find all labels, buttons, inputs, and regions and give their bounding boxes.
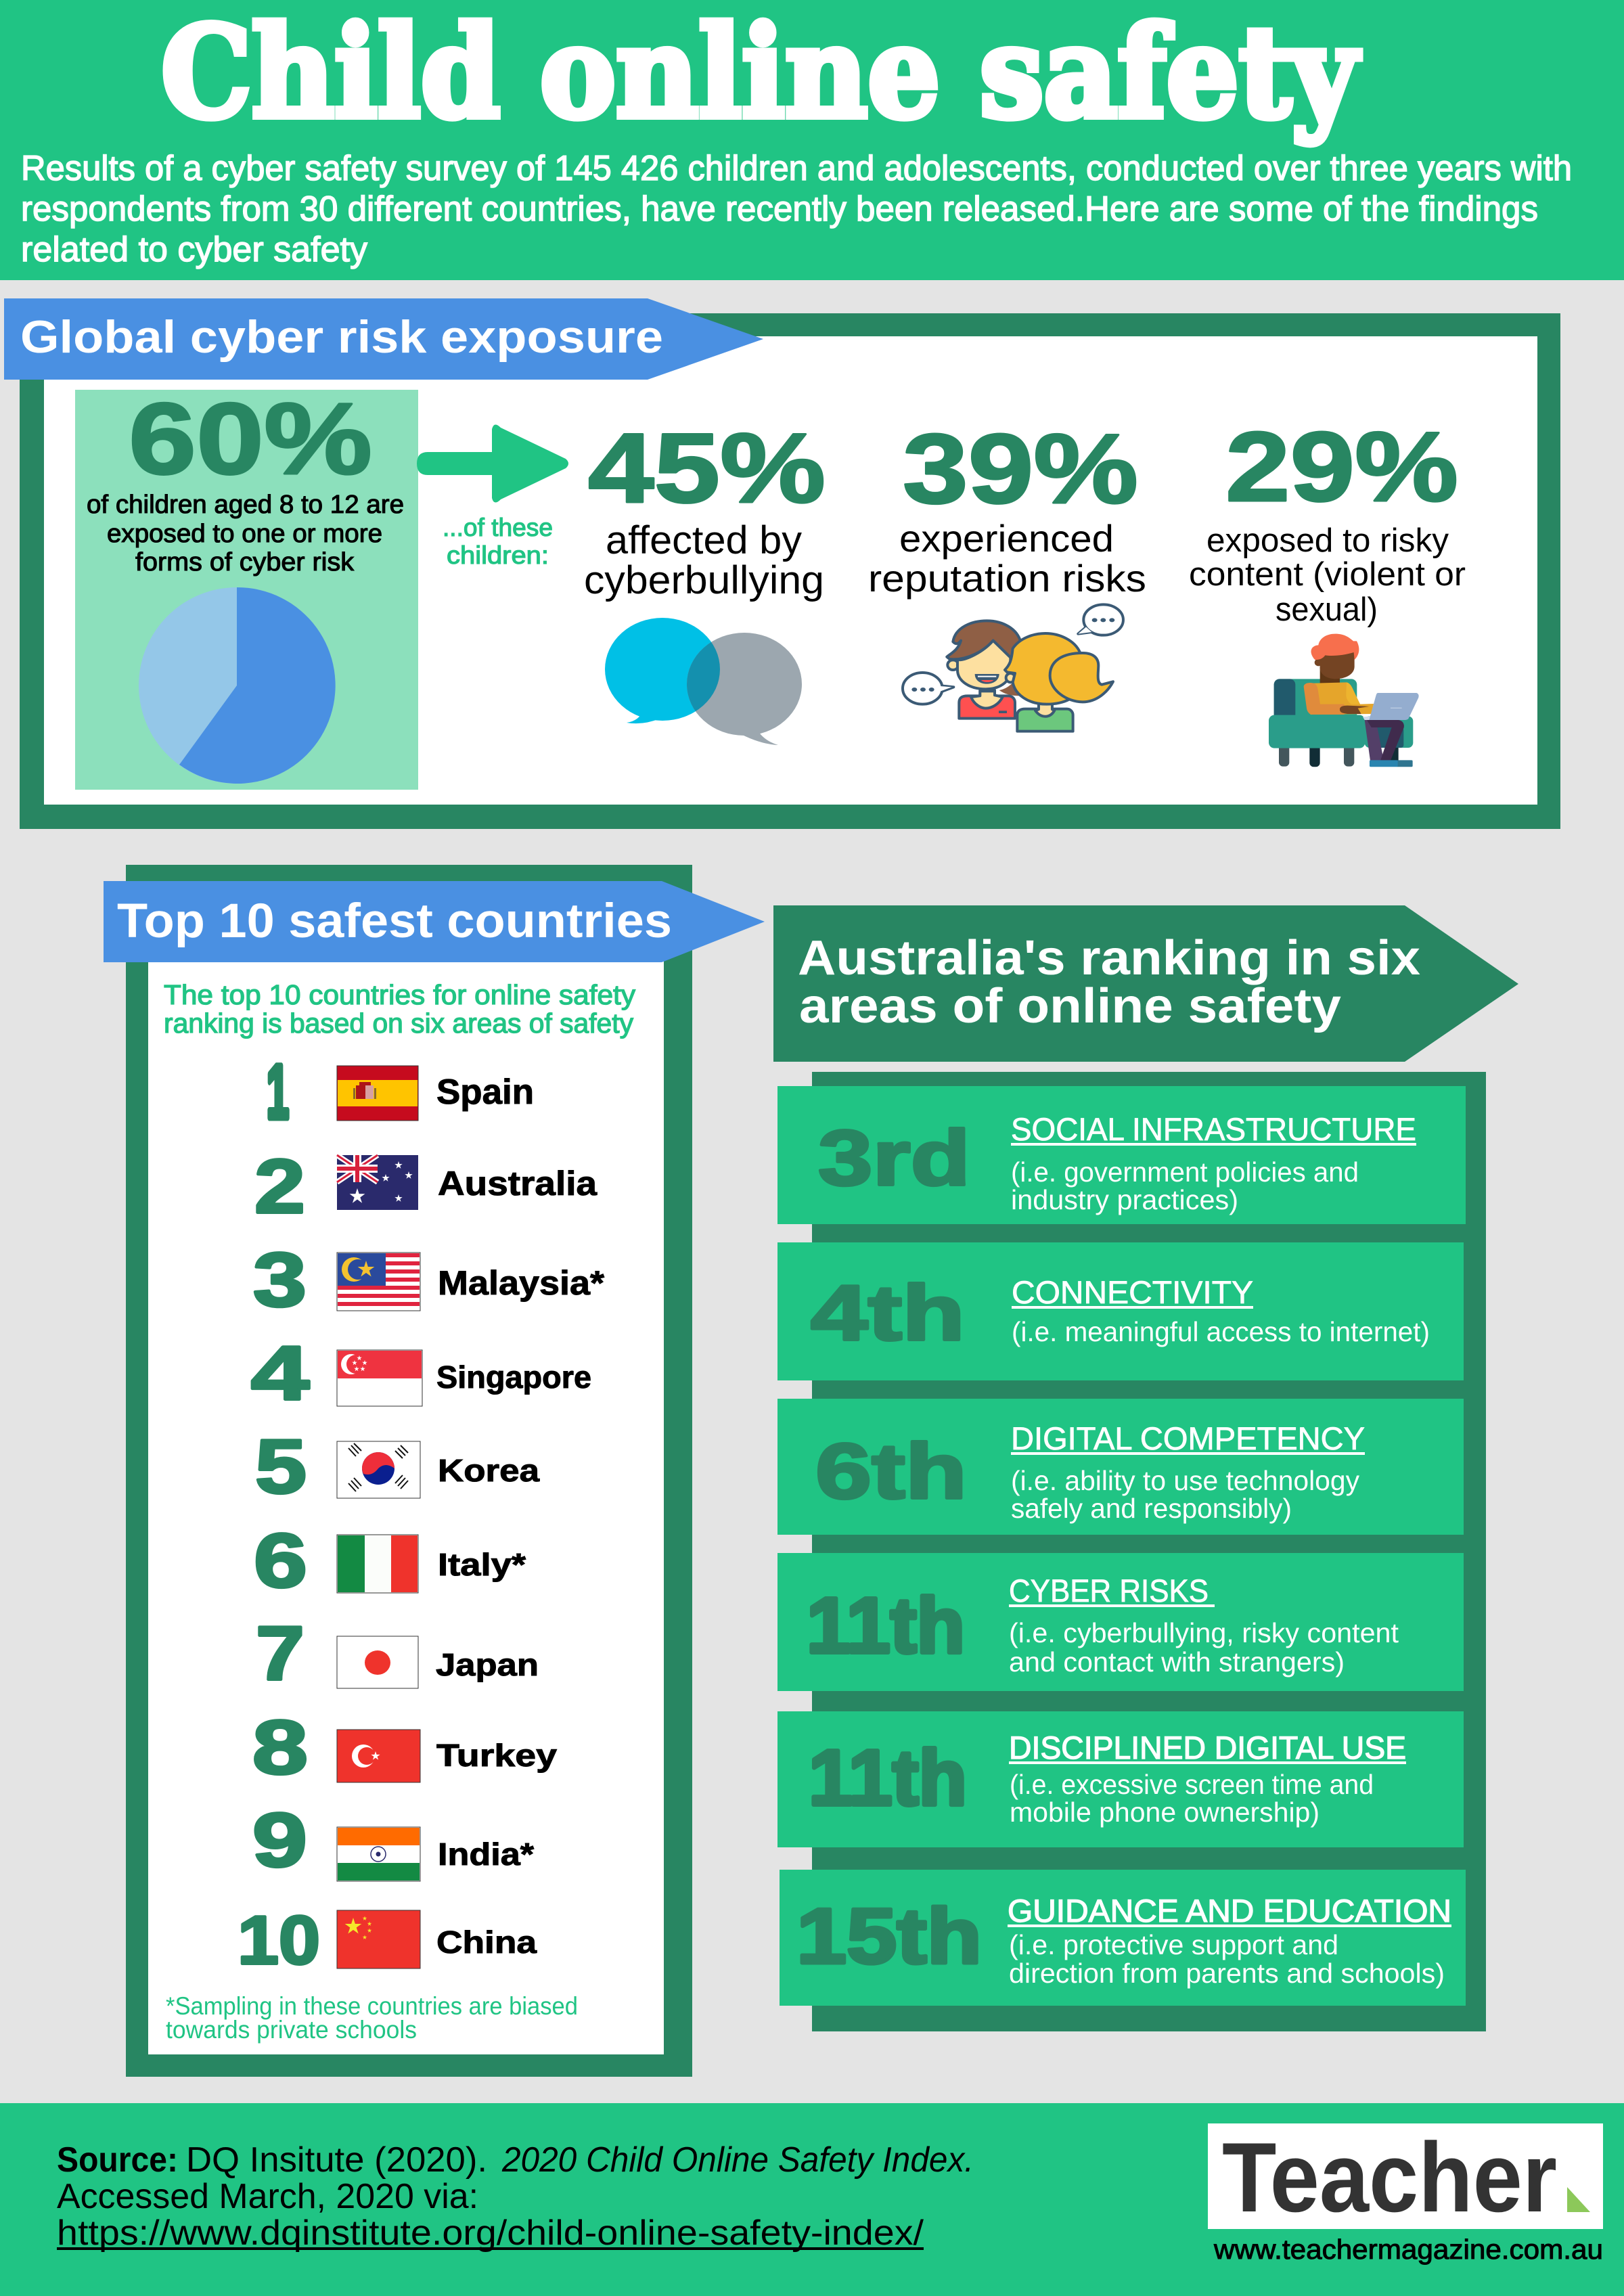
stat: 45% cyberbullying: cyberbullying xyxy=(584,558,824,602)
rank 1: Spain xyxy=(267,1050,534,1134)
intro text: respondents from 30 different countries, have recently been released.Here are some of the findings xyxy=(21,189,1538,229)
row: cyber risks 11th: CYBER RISKS xyxy=(1009,1573,1209,1608)
rank 1: Spain: Spain xyxy=(436,1073,534,1112)
banner: global cyber risk exposure xyxy=(4,298,763,380)
label: of these children xyxy=(443,514,553,569)
label: of these children: ...of these xyxy=(443,514,553,541)
banner: top 10 safest countries: Top 10 safest countries xyxy=(117,895,672,948)
row: guidance and education 15th: direction from parents and schools) xyxy=(1009,1958,1445,1989)
rank 8: Turkey: Turkey xyxy=(436,1738,557,1773)
arrow xyxy=(417,424,568,503)
rank 4: Singapore: Singapore xyxy=(436,1359,591,1395)
icon: speech bubbles xyxy=(605,618,802,745)
rank 3: Malaysia: Malaysia* xyxy=(438,1264,605,1302)
row: guidance and education 15th: (i.e. protective support and xyxy=(1009,1929,1338,1960)
stat: 39% reputation risks: 39% xyxy=(903,413,1138,524)
source citation: DQ Insitute (2020). xyxy=(186,2140,487,2180)
intro text: Results of a cyber safety survey of 145 426 children and adolescents, conducted over three years with xyxy=(21,149,1572,188)
panel: Australia's ranking xyxy=(773,905,1518,2031)
row: disciplined digital use 11th: DISCIPLINED DIGITAL USE xyxy=(1009,1730,1406,1765)
row: guidance and education 15th: 15th xyxy=(796,1892,982,1980)
stat: 60%: 60% xyxy=(129,382,372,495)
icon: two people talking xyxy=(903,604,1123,731)
rank 6: Italy: Italy* xyxy=(438,1547,526,1582)
row: social infrastructure 3rd: industry practices) xyxy=(1011,1184,1238,1215)
banner: Australia's ranking xyxy=(773,905,1518,1062)
row: guidance and education 15th: GUIDANCE AND EDUCATION xyxy=(1008,1893,1451,1929)
row: social infrastructure 3rd: 3rd xyxy=(818,1114,970,1202)
source citation: Source: xyxy=(57,2140,178,2180)
rank 10: China xyxy=(238,1903,537,1979)
rank 7: Japan xyxy=(256,1611,539,1696)
row: disciplined digital use 11th xyxy=(777,1711,1464,1847)
row: cyber risks 11th: 11th xyxy=(807,1581,965,1669)
rank 7: Japan: Japan xyxy=(436,1647,539,1682)
row: disciplined digital use 11th: (i.e. excessive screen time and xyxy=(1010,1769,1374,1800)
rank 9: India: India* xyxy=(438,1837,534,1872)
header band xyxy=(0,0,1624,280)
row: social infrastructure 3rd: (i.e. government policies and xyxy=(1011,1156,1359,1188)
icon: person with laptop on chair xyxy=(1269,634,1419,767)
rank 5: Korea: Korea xyxy=(438,1453,539,1488)
row: digital competency 6th: DIGITAL COMPETENCY xyxy=(1011,1420,1365,1456)
source citation: Accessed March, 2020 via: xyxy=(57,2177,478,2216)
row: digital competency 6th: safely and responsibly) xyxy=(1011,1493,1292,1524)
stat: 45% cyberbullying xyxy=(584,413,826,602)
rank 8: Turkey: 8 xyxy=(252,1705,308,1790)
rank 2: Australia: 2 xyxy=(254,1144,305,1229)
row: digital competency 6th: (i.e. ability to use technology xyxy=(1011,1465,1359,1496)
panel: 60 percent box xyxy=(75,382,418,790)
stat: 29% risky content: content (violent or xyxy=(1189,556,1466,593)
label: of these children: children: xyxy=(447,541,549,569)
intro text xyxy=(21,149,1572,269)
description: 60 percent: of children aged 8 to 12 are xyxy=(87,491,404,519)
footnote: towards private schools xyxy=(166,2016,417,2044)
row: disciplined digital use 11th: 11th xyxy=(809,1734,967,1822)
rank 3: Malaysia: 3 xyxy=(253,1237,307,1322)
rank 2: Australia: Australia xyxy=(438,1165,597,1202)
row: social infrastructure 3rd: SOCIAL INFRASTRUCTURE xyxy=(1011,1111,1416,1147)
row: cyber risks 11th xyxy=(777,1553,1464,1691)
row: cyber risks 11th: and contact with strangers) xyxy=(1009,1646,1345,1678)
row: digital competency 6th xyxy=(777,1399,1464,1535)
banner: Australia's ranking: Australia's ranking in six xyxy=(798,931,1420,985)
rank 9: India: 9 xyxy=(252,1797,307,1883)
rank 2: Australia xyxy=(254,1144,597,1229)
website: www.teachermagazine.com.au xyxy=(1213,2234,1603,2265)
stat: 39% reputation risks: reputation risks xyxy=(868,557,1146,600)
stat: 29% risky content xyxy=(1189,411,1466,628)
stat: 45% cyberbullying: 45% xyxy=(588,413,826,523)
row: guidance and education 15th xyxy=(780,1870,1466,2006)
footnote: *Sampling in these countries are biased xyxy=(166,1992,578,2020)
row: connectivity 4th: (i.e. meaningful access to internet) xyxy=(1012,1316,1430,1347)
source citation xyxy=(57,2140,974,2253)
rank 10: China: 10 xyxy=(238,1903,320,1979)
description: 60 percent: forms of cyber risk xyxy=(135,548,355,577)
rank 8: Turkey xyxy=(252,1705,557,1790)
rank 10: China: China xyxy=(436,1924,537,1960)
row: connectivity 4th: 4th xyxy=(811,1269,965,1357)
title: Child online safety xyxy=(161,0,1360,146)
row: digital competency 6th: 6th xyxy=(815,1427,967,1515)
stat: 29% risky content: sexual) xyxy=(1276,591,1378,628)
banner: global cyber risk exposure: Global cyber risk exposure xyxy=(20,311,663,363)
stat: 29% risky content: 29% xyxy=(1225,411,1458,522)
rank 5: Korea: 5 xyxy=(255,1424,307,1509)
rank 1: Spain: 1 xyxy=(267,1050,289,1134)
banner: Australia's ranking: areas of online safety xyxy=(799,979,1341,1033)
stat: 39% reputation risks: experienced xyxy=(899,517,1114,560)
rank 4: Singapore: 4 xyxy=(251,1330,309,1416)
intro: ranking basis: The top 10 countries for online safety xyxy=(164,979,636,1010)
rank 4: Singapore xyxy=(251,1330,591,1416)
rank 7: Japan: 7 xyxy=(256,1611,304,1696)
row: social infrastructure 3rd xyxy=(777,1086,1466,1224)
row: disciplined digital use 11th: mobile phone ownership) xyxy=(1010,1797,1320,1828)
banner: top 10 safest countries xyxy=(104,881,765,962)
row: cyber risks 11th: (i.e. cyberbullying, risky content xyxy=(1009,1617,1399,1648)
footer band xyxy=(0,2103,1624,2296)
rank 6: Italy: 6 xyxy=(254,1518,307,1603)
rank 5: Korea xyxy=(255,1424,539,1509)
logo: Teacher: Teacher xyxy=(1222,2122,1557,2232)
row: connectivity 4th xyxy=(777,1242,1464,1380)
panel: top 10 safest countries xyxy=(104,865,765,2077)
row: connectivity 4th: CONNECTIVITY xyxy=(1012,1274,1253,1310)
intro text: related to cyber safety xyxy=(21,230,367,269)
stat: 39% reputation risks xyxy=(868,413,1146,600)
source citation: https://www.dqinstitute.org/child-online-safety-index/ xyxy=(57,2213,924,2253)
stat: 29% risky content: exposed to risky xyxy=(1206,522,1449,559)
intro: ranking basis xyxy=(164,979,636,1039)
description: 60 percent xyxy=(87,491,404,577)
footnote xyxy=(166,1992,578,2044)
rank 6: Italy xyxy=(254,1518,526,1603)
rank 9: India xyxy=(252,1797,534,1883)
panel: global cyber risk exposure xyxy=(4,298,1560,829)
description: 60 percent: exposed to one or more xyxy=(107,520,382,548)
rank 3: Malaysia xyxy=(253,1237,605,1322)
source citation: 2020 Child Online Safety Index. xyxy=(501,2140,974,2180)
intro: ranking basis: ranking is based on six areas of safety xyxy=(164,1008,633,1039)
pie chart: 60 percent xyxy=(139,587,336,784)
stat: 45% cyberbullying: affected by xyxy=(606,518,802,562)
